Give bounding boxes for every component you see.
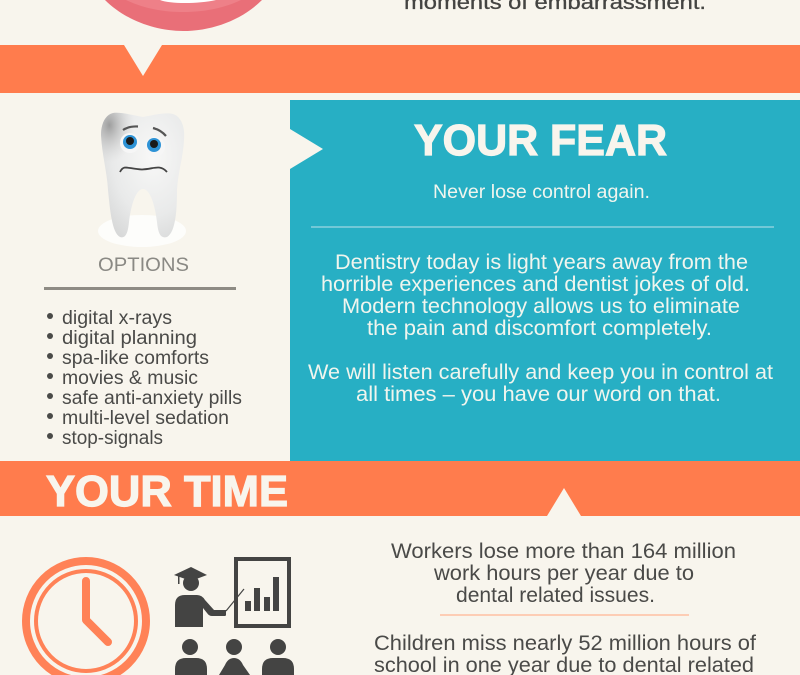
body text: all times – you have our word on that. [356, 383, 721, 406]
time statistics text: dental related issues. [456, 584, 655, 607]
time statistics text: Workers lose more than 164 million [391, 540, 736, 563]
heading: your fear: YOUR FEAR [414, 116, 667, 165]
body text: Modern technology allows us to eliminate [342, 295, 740, 318]
heading: your time: YOUR TIME [46, 467, 288, 516]
subheading: Never lose control again. [433, 182, 650, 203]
options list: safe anti-anxiety pills [62, 388, 242, 409]
icon: presenter and audience [174, 559, 294, 675]
options list [47, 308, 242, 449]
body text [308, 251, 773, 406]
orange band: your time [0, 461, 800, 516]
body text: Dentistry today is light years away from the [335, 251, 748, 274]
illustration: smiling mouth [105, 0, 262, 31]
panel: your fear [290, 100, 800, 462]
orange divider band with notch [0, 45, 800, 93]
icon: worried tooth [98, 113, 186, 247]
time statistics text: Children miss nearly 52 million hours of [374, 632, 756, 655]
icon: clock [26, 561, 146, 675]
body text: the pain and discomfort completely. [367, 317, 712, 340]
options heading: OPTIONS [98, 255, 189, 276]
body text: We will listen carefully and keep you in control at [308, 361, 773, 384]
time statistics text: work hours per year due to [433, 562, 694, 585]
options list: multi-level sedation [62, 408, 229, 429]
options list: stop-signals [62, 428, 163, 449]
options list: spa-like comforts [62, 348, 209, 369]
options list: digital planning [62, 328, 197, 349]
options list: digital x-rays [62, 308, 172, 329]
time statistics text [374, 540, 756, 675]
panel: options [44, 113, 242, 449]
options list: movies & music [62, 368, 198, 389]
body text: horrible experiences and dentist jokes of old. [321, 273, 750, 296]
